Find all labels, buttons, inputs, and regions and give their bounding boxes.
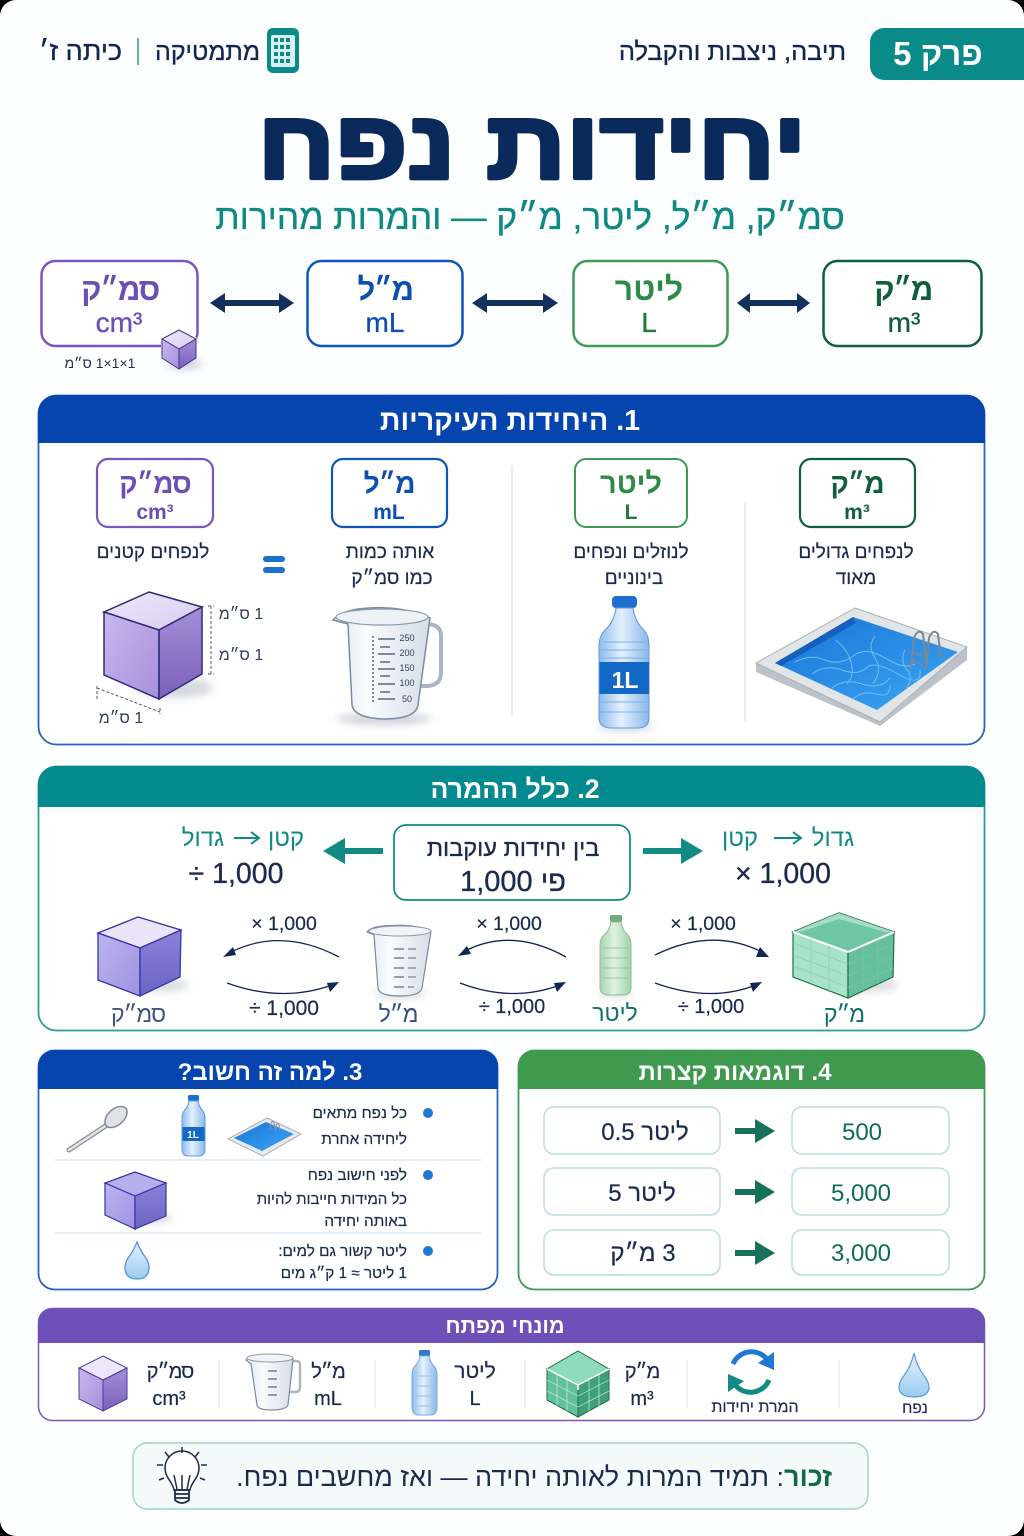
example row 2 [544, 1168, 949, 1215]
panel: why it matters [38, 1050, 498, 1290]
point 2: לפני חישוב נפח [308, 1167, 407, 1184]
point 2: באותה יחידה [324, 1213, 407, 1230]
subtitle: סמ״ק, מ״ל, ליטר, מ״ק — והמרות מהירות [215, 198, 845, 237]
panel: short examples [518, 1050, 985, 1290]
icon: small cube [161, 328, 202, 370]
large to small rule: גדול [812, 825, 854, 852]
point 3: ליטר קשור גם למים: [278, 1243, 407, 1260]
unit chain [42, 261, 982, 371]
column: cubic centimetre: cm³ [136, 501, 174, 524]
icon: small bottle: 1L [187, 1130, 199, 1141]
conversion arrows: mL and L [458, 913, 566, 1018]
column: millilitre: mL [373, 501, 405, 524]
point 1 [313, 1105, 433, 1148]
column: litre: L [625, 501, 638, 524]
point 2: כל המידות חייבות להיות [257, 1191, 407, 1208]
example row 1: 500 [842, 1119, 882, 1146]
column: litre: בינוניים [605, 568, 663, 589]
column: cubic metre: מאוד [836, 568, 876, 589]
point 1: ליחידה אחרת [321, 1131, 407, 1148]
icon: measuring cup: 200 [399, 648, 415, 658]
column: litre [573, 459, 689, 731]
term: volume: נפח [902, 1400, 928, 1417]
term: cubic centimetre: cm³ [152, 1388, 186, 1410]
point 1: כל נפח מתאים [313, 1105, 407, 1122]
example row 1 [544, 1107, 949, 1154]
label: litre: ליטר [592, 1000, 638, 1026]
title: יחידות נפח [258, 92, 806, 199]
unit box: litre: L [641, 307, 657, 338]
header: chapter name: תיבה, ניצבות והקבלה [619, 38, 846, 66]
icon: measuring cup: 50 [402, 694, 412, 704]
panel header [38, 1308, 985, 1343]
small to large rule: ÷ 1,000 [189, 858, 283, 890]
unit box: cubic centimetre: סמ״ק [81, 272, 159, 307]
icon: large purple cube with dimensions [97, 592, 263, 727]
column: millilitre: כמו סמ״ק [351, 568, 433, 589]
icon: swimming pool [756, 608, 967, 726]
header: subject and grade [39, 28, 299, 73]
callout: remember [133, 1443, 868, 1509]
example row 3: 3,000 [831, 1240, 891, 1267]
arrow: to divide [323, 838, 383, 864]
large to small rule: קטן [722, 825, 758, 852]
rule box [394, 825, 630, 900]
point 3: 1 ליטר ≈ 1 ק״ג מים [281, 1265, 407, 1282]
term: cubic centimetre: סמ״ק [147, 1361, 194, 1383]
term: millilitre: מ״ל [311, 1361, 345, 1383]
point 2 [257, 1167, 433, 1230]
term: millilitre [246, 1354, 345, 1410]
column: cubic centimetre: סמ״ק [119, 468, 191, 499]
icon: measuring cup: 150 [399, 663, 415, 673]
icon: water bottle: 1L [612, 667, 638, 693]
unit box: litre [574, 261, 728, 346]
column: cubic centimetre [97, 459, 263, 727]
term: cubic metre: מ״ק [625, 1361, 660, 1383]
conversion arrows: mL and L: ÷ 1,000 [479, 996, 545, 1018]
panel: key terms [38, 1308, 985, 1420]
term: cubic centimetre [79, 1356, 194, 1411]
column: millilitre [332, 459, 447, 725]
double arrow [472, 293, 558, 313]
term: cubic metre: m³ [630, 1388, 654, 1410]
label: millilitre: מ״ל [379, 1001, 417, 1027]
arrow: to multiply [643, 838, 703, 864]
term: litre: ליטר [454, 1360, 496, 1383]
panel header: 3. למה זה חשוב? [178, 1059, 362, 1086]
icon: water bottle [598, 596, 654, 731]
column: cubic metre: מ״ק [830, 468, 884, 499]
icon: small beaker [367, 925, 431, 998]
term: millilitre: mL [314, 1388, 342, 1410]
icon: blue-purple cube [105, 1172, 172, 1229]
icon: large purple cube with dimensions: 1 ס״מ [219, 606, 263, 623]
unit box: cubic metre [824, 261, 982, 346]
panel header: מונחי מפתח [446, 1314, 564, 1338]
example row 3: 3 מ״ק [610, 1240, 676, 1267]
panel header [518, 1050, 985, 1089]
large to small rule: × 1,000 [735, 858, 831, 890]
unit box: cubic centimetre [42, 261, 202, 371]
icon: small bottle [182, 1095, 205, 1156]
rule box: פי 1,000 [460, 866, 566, 898]
unit box: millilitre: mL [366, 307, 404, 338]
column: cubic metre: m³ [844, 501, 870, 524]
term: cubic metre [547, 1351, 660, 1417]
conversion arrows: cm3 and mL: × 1,000 [251, 913, 317, 935]
conversion arrows: L and m3 [655, 913, 769, 1018]
conversion arrows: cm3 and mL [223, 913, 339, 1020]
example row 3 [544, 1230, 949, 1275]
header: subject and grade: כיתה ז׳ [39, 36, 122, 66]
example row 2: 5,000 [831, 1180, 891, 1207]
icon: measuring cup: 250 [399, 633, 415, 643]
icon: measuring cup: 100 [399, 678, 415, 688]
icon: green tank [793, 913, 898, 998]
conversion arrows: L and m3: × 1,000 [670, 913, 736, 935]
double arrow [737, 293, 810, 313]
conversion arrows: mL and L: × 1,000 [476, 913, 542, 935]
column: litre: ליטר [600, 468, 662, 500]
large to small rule [722, 825, 854, 890]
panel header [38, 766, 985, 807]
unit box: cubic metre: מ״ק [874, 272, 932, 307]
icon: small pool [228, 1118, 301, 1156]
label: cubic centimetre: סמ״ק [111, 1001, 165, 1027]
panel header [38, 1050, 498, 1089]
term: litre: L [469, 1388, 481, 1410]
icon: calculator [267, 28, 299, 73]
unit box: cubic metre: m³ [888, 307, 920, 338]
small to large rule: גדול [182, 825, 224, 852]
panel: conversion rule [38, 766, 985, 1030]
small to large rule: קטן [268, 825, 304, 852]
term: unit conversion: המרת יחידות [711, 1399, 799, 1416]
unit box: cubic centimetre: 1×1×1 ס״מ [65, 355, 136, 371]
panel header: 2. כלל ההמרה [430, 774, 600, 804]
small to large rule [182, 825, 304, 890]
header: chapter tab: פרק 5 [893, 35, 983, 72]
term: litre [412, 1350, 496, 1415]
panel header: 4. דוגמאות קצרות [639, 1059, 832, 1086]
conversion arrows: L and m3: ÷ 1,000 [678, 996, 744, 1018]
example row 1: ליטר 0.5 [601, 1119, 689, 1146]
icon: green bottle [598, 915, 634, 997]
term: unit conversion [711, 1352, 799, 1416]
conversion arrows: cm3 and mL: ÷ 1,000 [249, 997, 319, 1020]
column: cubic metre: לנפחים גדולים [798, 542, 914, 563]
column: cubic metre [756, 459, 967, 726]
column: cubic centimetre: לנפחים קטנים [97, 542, 209, 563]
panel header: 1. היחידות העיקריות [380, 405, 640, 437]
callout: remember: זכור: תמיד המרות לאותה יחידה — ואז מחשבים נפח. [236, 1462, 832, 1492]
example row 2: ליטר 5 [608, 1180, 676, 1207]
unit box: millilitre: מ״ל [357, 272, 413, 307]
header: subject and grade: מתמטיקה [155, 38, 260, 66]
panel: main units [38, 395, 985, 744]
term: volume [899, 1353, 929, 1417]
column: millilitre: אותה כמות [346, 542, 434, 563]
double arrow [210, 293, 294, 313]
unit box: millilitre [308, 261, 462, 346]
icon: measuring cup [333, 608, 441, 725]
header: chapter tab [870, 28, 1024, 80]
icon: large purple cube with dimensions: 1 ס״מ [99, 710, 143, 727]
icon: light bulb [157, 1447, 207, 1503]
point 3 [278, 1243, 433, 1282]
rule box: בין יחידות עוקבות [427, 836, 599, 862]
unit box: cubic centimetre: cm³ [96, 307, 142, 338]
equals sign [263, 556, 285, 573]
column: litre: לנוזלים ונפחים [573, 542, 689, 563]
column: millilitre: מ״ל [364, 468, 414, 499]
icon: purple cube [98, 917, 188, 996]
icon: spoon [69, 1102, 131, 1150]
icon: water drop [125, 1242, 149, 1279]
label: cubic metre: מ״ק [824, 1001, 864, 1027]
unit box: litre: ליטר [615, 271, 683, 307]
icon: large purple cube with dimensions: 1 ס״מ [219, 647, 263, 664]
panel header [38, 395, 985, 443]
